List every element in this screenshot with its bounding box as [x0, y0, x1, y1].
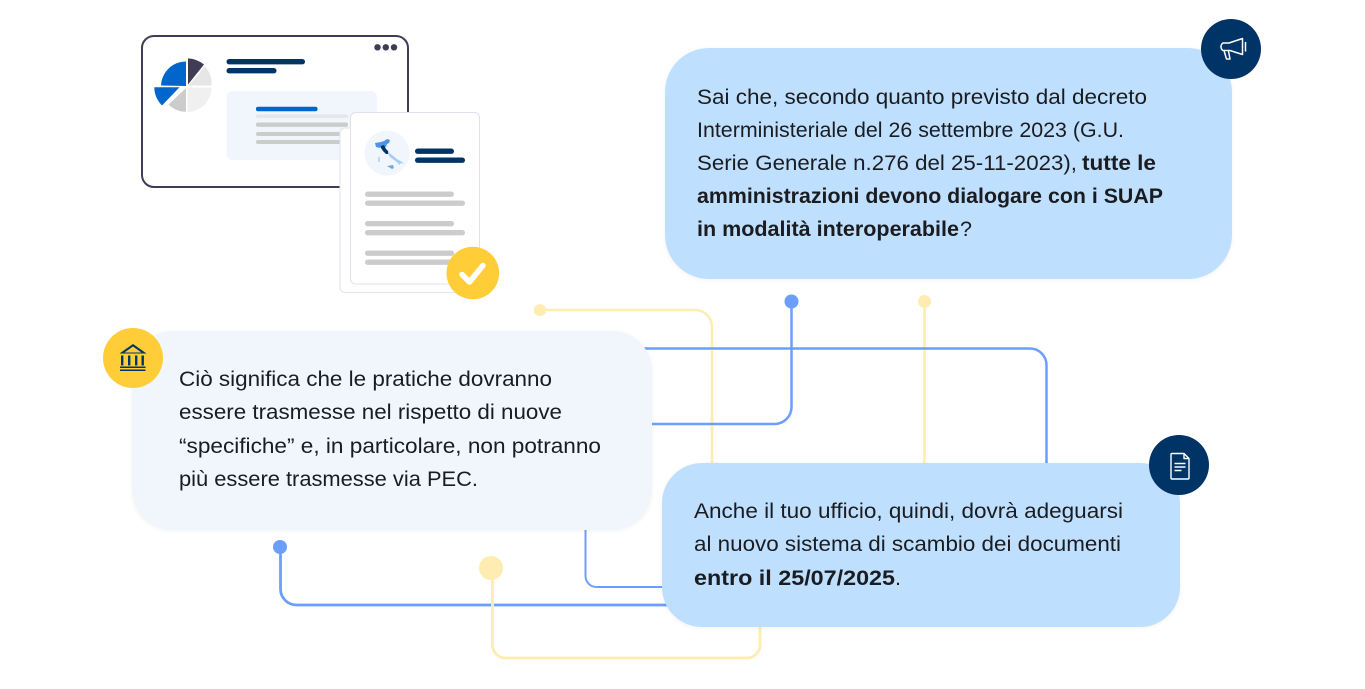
text: decree notice paragraph: in modalità interoperabile	[697, 217, 959, 241]
text: consequences paragraph: Ciò significa che le pratiche dovranno	[179, 367, 552, 391]
icon: megaphone	[1201, 19, 1261, 79]
connector: yellow vertical line from top dot	[918, 295, 931, 465]
text: deadline paragraph	[694, 499, 1123, 590]
text: consequences paragraph: più essere trasmesse via PEC.	[179, 467, 478, 491]
text: deadline paragraph: entro il 25/07/2025	[694, 566, 895, 590]
panel: consequences	[132, 331, 652, 530]
text: decree notice paragraph: Sai che, secondo quanto previsto dal decreto	[697, 85, 1147, 109]
text: deadline paragraph: .	[895, 566, 901, 590]
text: deadline paragraph: al nuovo sistema di scambio dei documenti	[694, 532, 1121, 556]
text: decree notice paragraph: Interministeriale del 26 settembre 2023 (G.U.	[697, 118, 1124, 142]
connector: blue long line to third bubble	[640, 348, 1046, 465]
text: consequences paragraph: “specifiche” e, in particolare, non potranno	[179, 434, 601, 458]
connector: blue line from lower left dot	[273, 540, 680, 605]
text: decree notice paragraph: amministrazioni devono dialogare con i SUAP	[697, 184, 1163, 208]
browser window	[142, 36, 408, 187]
front document sheet	[350, 112, 480, 284]
icon: institution building	[103, 328, 163, 388]
panel: decree notice	[665, 48, 1232, 279]
text: decree notice paragraph: ?	[960, 217, 972, 241]
icon: yellow check badge	[446, 247, 499, 299]
text: consequences paragraph: essere trasmesse nel rispetto di nuove	[179, 400, 562, 424]
text: deadline paragraph: Anche il tuo ufficio, quindi, dovrà adeguarsi	[694, 499, 1123, 523]
text: decree notice paragraph: tutte le	[1082, 151, 1156, 175]
connector: yellow line from small dot to third bubble	[534, 304, 712, 465]
pie chart	[154, 58, 212, 112]
connector: blue line from top dot to left bubble	[650, 294, 798, 424]
panel: deadline	[662, 463, 1180, 627]
connector: thin blue line below left bubble	[586, 528, 670, 587]
text: consequences paragraph	[179, 367, 601, 491]
icon: document	[1149, 435, 1209, 495]
text: decree notice paragraph	[697, 85, 1163, 241]
text: decree notice paragraph: Serie Generale n.276 del 25-11-2023),	[697, 151, 1077, 175]
back document sheet	[340, 128, 470, 292]
map of Italy badge	[364, 130, 410, 176]
illustration: dashboard window and documents	[142, 36, 499, 299]
connector: yellow line from large dot under third bubble	[479, 556, 760, 658]
